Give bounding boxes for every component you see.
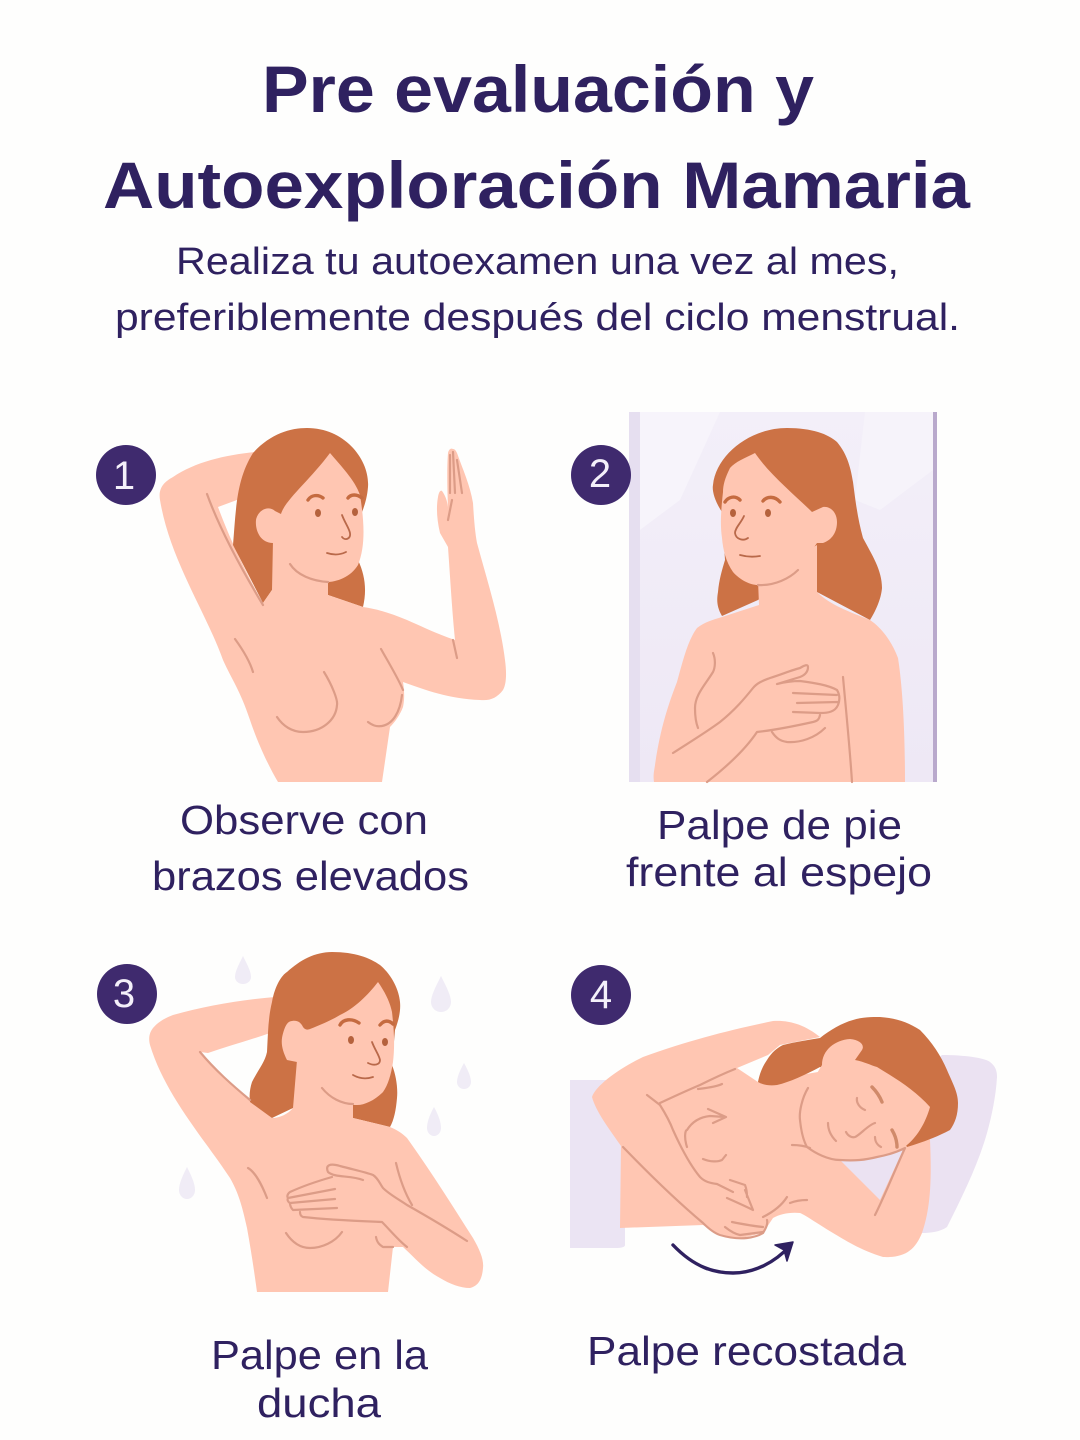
number badge 2 [571, 445, 631, 505]
caption 4: Palpe recostada [587, 1328, 906, 1374]
caption 3 [211, 1332, 428, 1426]
water drops [179, 956, 471, 1199]
illustration: arms raised [160, 428, 506, 782]
caption 1 [152, 797, 469, 899]
number badge 3 [97, 964, 157, 1024]
number badge 4: 4 [590, 973, 612, 1017]
mat and pillow [570, 1055, 997, 1248]
caption 1: Observe con [180, 797, 428, 843]
number badge 3: 3 [113, 972, 135, 1016]
panel: step 1 [96, 428, 506, 899]
subtitle [115, 241, 960, 339]
curved arrow [673, 1242, 793, 1273]
panel: step 2 [571, 412, 937, 895]
number badge 1 [96, 445, 156, 505]
mirror [629, 412, 937, 782]
number badge 4 [571, 965, 631, 1025]
illustration: palpating in front of mirror [654, 428, 905, 782]
caption 1: brazos elevados [152, 853, 469, 899]
caption 3: ducha [257, 1380, 381, 1426]
illustration: palpating lying down [592, 1017, 958, 1257]
panel: step 4 [570, 965, 997, 1374]
subtitle: Realiza tu autoexamen una vez al mes, [176, 241, 899, 283]
caption 3: Palpe en la [211, 1332, 428, 1378]
subtitle: preferiblemente después del ciclo menstrual. [115, 297, 960, 339]
title [103, 52, 971, 222]
number badge 1: 1 [113, 454, 135, 498]
title: Pre evaluación y [262, 52, 814, 126]
caption 2: Palpe de pie [657, 802, 902, 848]
panel: step 3 [97, 952, 483, 1426]
caption 2 [626, 802, 932, 895]
title: Autoexploración Mamaria [103, 148, 971, 222]
caption 2: frente al espejo [626, 849, 932, 895]
number badge 2: 2 [589, 452, 611, 496]
illustration: palpating in the shower [149, 952, 483, 1292]
